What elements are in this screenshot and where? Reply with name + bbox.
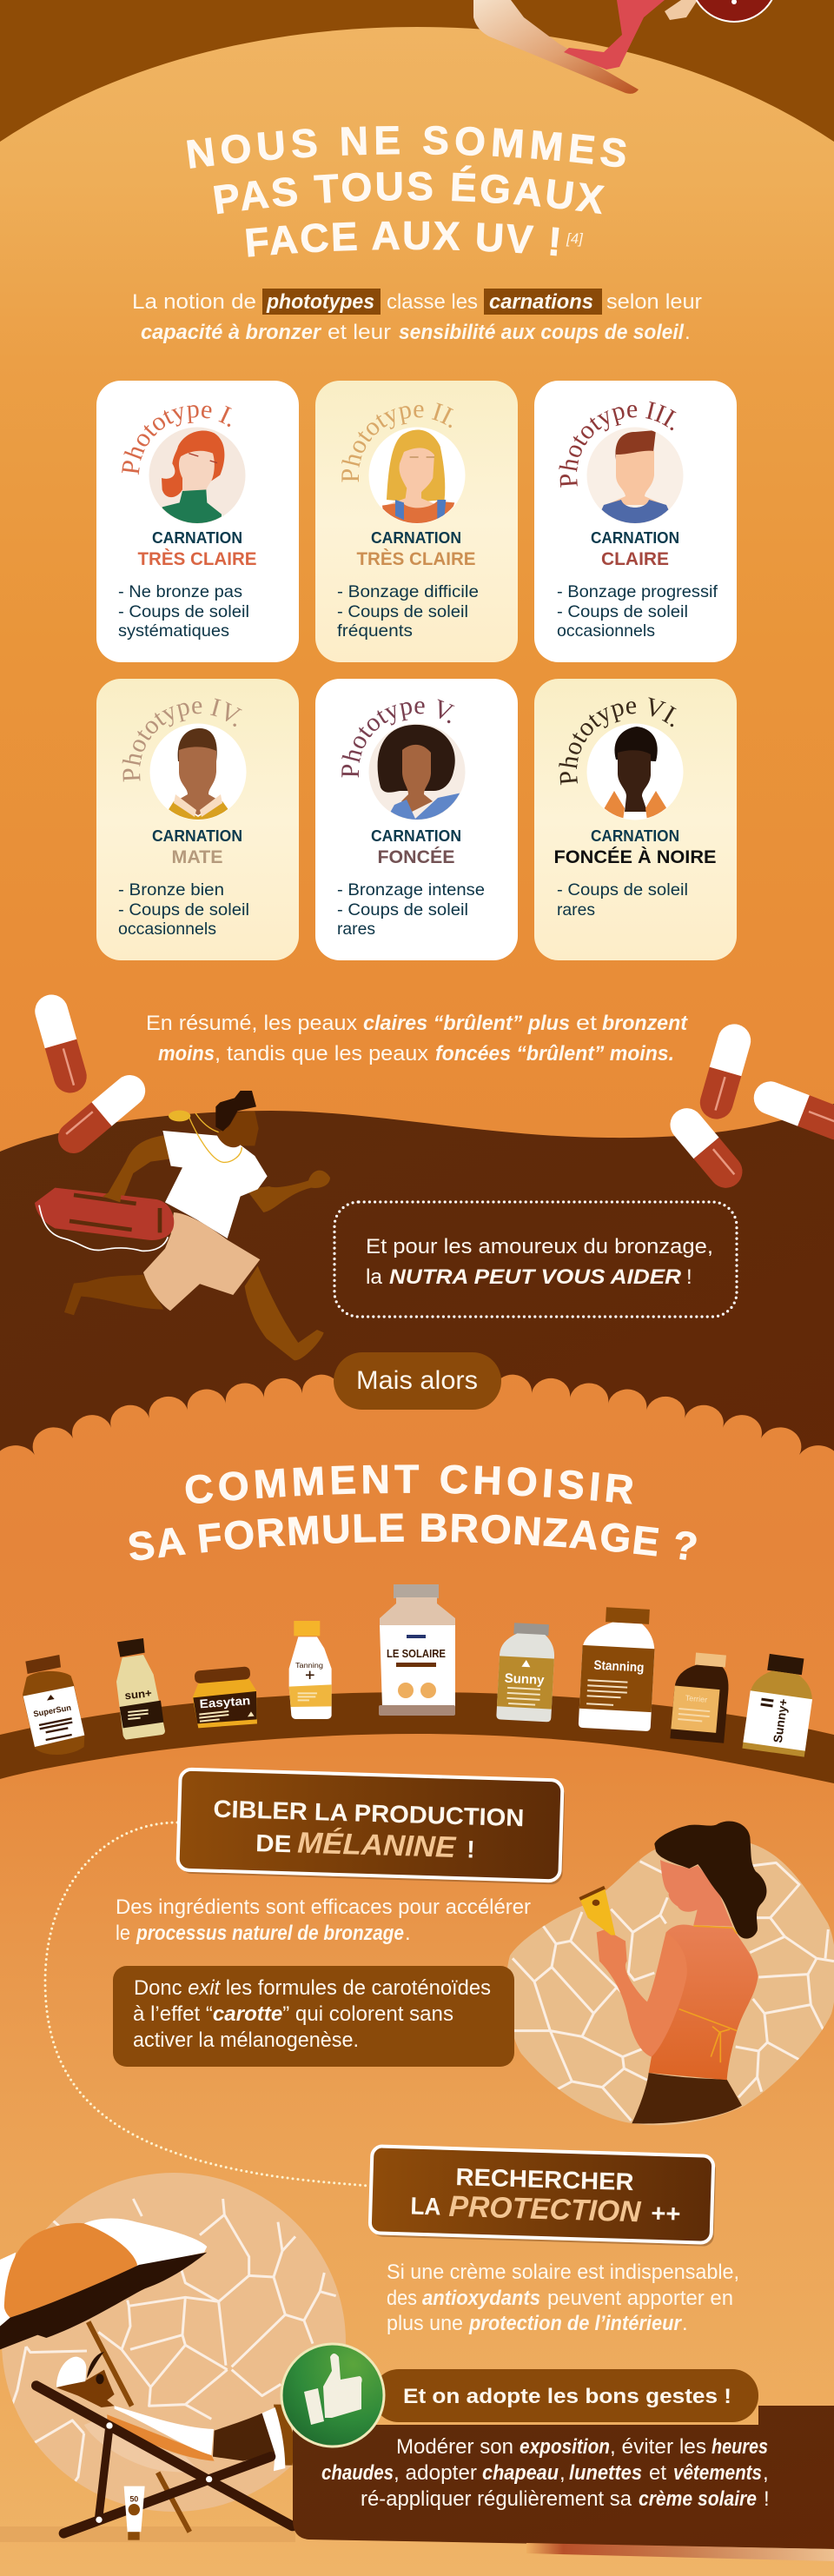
- heading box: cibler la production de mélanine: DE: [255, 1829, 292, 1857]
- panel: phototype I: systématiques: [118, 621, 229, 641]
- heading box: rechercher la protection: [369, 2146, 716, 2247]
- panel: phototype II: [315, 381, 518, 662]
- bottle: Stanning: Stanning: [593, 1658, 645, 1676]
- panel: bons gestes: [293, 2369, 834, 2561]
- panel: phototype VI: Phototype VI.: [559, 697, 677, 786]
- panel: phototype IV: [96, 679, 299, 960]
- icon: sunscreen tube: [124, 2486, 145, 2540]
- icon: thumbs up badge: [281, 2344, 384, 2447]
- text block: protection: Si une crème solaire est indispensable,: [387, 2261, 739, 2284]
- panel: phototype II: Phototype II.: [341, 402, 453, 482]
- heading box: rechercher la protection: ++: [651, 2200, 681, 2227]
- text block: ingredients: le: [116, 1922, 130, 1945]
- panel: phototype IV: - Coups de soleil: [118, 900, 249, 920]
- summary text: bronzent: [602, 1012, 688, 1035]
- bottle: Le Solaire: [379, 1584, 455, 1716]
- title: nous ne sommes pas tous égaux: PAS TOUS ÉGAUX: [214, 165, 605, 214]
- callout: carotene box: [113, 1966, 514, 2067]
- text block: protection: [387, 2261, 739, 2335]
- panel: phototype III: - Coups de soleil: [557, 602, 688, 621]
- panel: phototype V: Phototype V.: [341, 699, 455, 777]
- intro text block: classe les: [387, 290, 478, 314]
- panel: phototype II: CARNATION: [371, 529, 461, 547]
- summary text: foncées “brûlent” moins.: [435, 1042, 674, 1066]
- text block: ingredients: processus naturel de bronzage: [136, 1922, 404, 1945]
- callout: dotted box: Et pour les amoureux du bronzage,: [366, 1235, 713, 1258]
- heading box: cibler la production de mélanine: !: [467, 1836, 475, 1863]
- callout: carotene box: activer la mélanogenèse.: [133, 2028, 359, 2052]
- icon: capsule 2: [51, 1069, 152, 1159]
- text block: gestes: [321, 2435, 770, 2511]
- heading: comment choisir: [129, 1464, 697, 1561]
- intro text block: phototypes: [266, 290, 374, 314]
- pill: et on adopte les bons gestes: [373, 2369, 758, 2422]
- intro text block: carnations: [489, 290, 593, 314]
- icon: capsule 5: [664, 1101, 749, 1195]
- text block: gestes: ,: [763, 2461, 769, 2485]
- heading: comment choisir: SA FORMULE BRONZAGE ?: [129, 1513, 697, 1561]
- intro text block: .: [685, 321, 691, 344]
- callout: dotted box: [334, 1202, 737, 1317]
- intro text block: sensibilité aux coups de soleil: [399, 321, 685, 344]
- bottle: Sunny: [496, 1622, 556, 1723]
- panel: phototype V: - Bronzage intense: [337, 880, 485, 900]
- panel: phototype III: CLAIRE: [601, 549, 669, 569]
- panel: phototype V: CARNATION: [371, 827, 461, 845]
- panel: phototype VI: - Coups de soleil: [557, 880, 688, 900]
- text block: gestes: et: [649, 2461, 666, 2485]
- portrait: red hair woman: [149, 428, 245, 524]
- bottle: Le Solaire: LE SOLAIRE: [387, 1647, 446, 1660]
- text block: gestes: chaudes: [321, 2461, 394, 2485]
- bottle: Tanning+: [289, 1621, 332, 1719]
- portrait: man with matte skin: [149, 723, 247, 820]
- text block: gestes: crème solaire: [639, 2487, 757, 2511]
- bottle: sun+: sun+: [124, 1687, 152, 1702]
- panel: phototype IV: occasionnels: [118, 920, 216, 939]
- panel: phototype IV: Phototype IV.: [122, 699, 242, 782]
- panel: phototype V: FONCÉE: [377, 847, 455, 867]
- text block: gestes: , adopter: [394, 2461, 477, 2485]
- top brown band with arc: [0, 0, 834, 142]
- text block: protection: plus une: [387, 2312, 463, 2335]
- text block: gestes: heures: [712, 2435, 768, 2459]
- text block: gestes: , éviter les: [610, 2435, 706, 2459]
- text block: gestes: exposition: [520, 2435, 610, 2459]
- text block: ingredients: Des ingrédients sont efficaces pour accélérer: [116, 1895, 531, 1919]
- bottle: dark amber: [670, 1651, 731, 1743]
- bottle: Tanning+: Tanning: [295, 1662, 323, 1670]
- panel: phototype I: [96, 381, 299, 662]
- text block: ingredients: .: [405, 1922, 411, 1945]
- portrait: man with dark skin: [587, 723, 683, 820]
- icon: sunscreen tube: 50: [129, 2495, 138, 2504]
- text block: gestes: ré-appliquer régulièrement sa: [361, 2487, 632, 2511]
- summary text: et: [576, 1012, 597, 1035]
- text block: protection: des: [387, 2287, 417, 2310]
- intro text block: et leur: [328, 321, 391, 344]
- illustration: skin cells and woman: [504, 1821, 834, 2129]
- heading box: cibler la production de mélanine: [177, 1769, 566, 1885]
- panel: phototype II: TRÈS CLAIRE: [356, 549, 476, 569]
- illustration: surfboard and ribbon at top: [473, 0, 778, 94]
- panel: phototype IV: CARNATION: [152, 827, 242, 845]
- callout: carotene box: à l’effet “carotte” qui colorent sans: [133, 2002, 453, 2026]
- icon: capsule 4: [749, 1077, 834, 1145]
- dark brown wave section with scalloped bottom: [0, 1104, 834, 1477]
- pill: mais alors: Mais alors: [356, 1366, 478, 1395]
- bottle: Easytan jar: Easytan: [199, 1693, 251, 1710]
- title: nous ne sommes pas tous égaux: FACE AUX UV !: [246, 221, 559, 257]
- icon: capsule 1: [31, 991, 90, 1097]
- panel: phototype I: - Ne bronze pas: [118, 582, 242, 601]
- text block: protection: protection de l’intérieur: [468, 2312, 683, 2335]
- text block: gestes: !: [764, 2487, 770, 2511]
- portrait: blonde woman: [368, 428, 466, 524]
- text block: gestes: vêtements: [673, 2461, 762, 2485]
- bottle: Sunny: Sunny: [504, 1671, 546, 1688]
- text block: ingredients: [116, 1895, 531, 1945]
- portrait: woman with dark curly hair: [368, 723, 466, 820]
- heading box: rechercher la protection: RECHERCHER: [455, 2163, 634, 2195]
- dotted connector path: [45, 1822, 368, 2186]
- heading box: cibler la production de mélanine: MÉLANINE: [297, 1827, 457, 1864]
- intro text block: La notion de: [132, 290, 256, 314]
- intro text block: capacité à bronzer: [141, 321, 322, 344]
- portrait: man with brown hair: [587, 428, 683, 524]
- bottle: Stanning: [579, 1606, 657, 1731]
- summary text: claires “brûlent” plus: [363, 1012, 570, 1035]
- bottle: dark amber: Terrier: [685, 1694, 708, 1704]
- panel: phototype V: [315, 679, 518, 960]
- text block: gestes: Modérer son: [396, 2435, 513, 2459]
- panel: phototype III: [534, 381, 737, 662]
- illustration: running lifeguard: [35, 1091, 330, 1360]
- bottle: sun+: [116, 1638, 165, 1740]
- text block: protection: .: [682, 2312, 688, 2335]
- illustration: beach chair, umbrella and sunbather: [0, 2218, 295, 2540]
- bottle: SuperSun: SuperSun: [33, 1703, 72, 1718]
- panel: phototype II: - Bonzage difficile: [337, 582, 479, 601]
- heading: comment choisir: COMMENT CHOISIR: [186, 1464, 632, 1504]
- summary text: En résumé, les peaux: [146, 1012, 357, 1035]
- callout: dotted box: !: [686, 1265, 692, 1289]
- panel: phototype III: occasionnels: [557, 621, 655, 641]
- pill: et on adopte les bons gestes: Et on adopte les bons gestes !: [403, 2385, 731, 2408]
- intro text block: [132, 289, 702, 344]
- panel: phototype I: - Coups de soleil: [118, 602, 249, 621]
- intro text block: selon leur: [606, 290, 702, 314]
- heading box: rechercher la protection: PROTECTION: [448, 2190, 642, 2228]
- heading box: rechercher la protection: LA: [410, 2193, 441, 2221]
- text block: gestes: ,: [559, 2461, 566, 2485]
- panel: phototype III: CARNATION: [591, 529, 679, 547]
- panel: phototype I: CARNATION: [152, 529, 242, 547]
- title: nous ne sommes pas tous égaux: NOUS NE SOMMES: [187, 125, 626, 169]
- panel: phototype IV: - Bronze bien: [118, 880, 224, 900]
- bottle: Sunny+: Sunny+: [771, 1698, 791, 1743]
- text block: gestes: lunettes: [569, 2461, 642, 2485]
- panel: phototype V: - Coups de soleil: [337, 900, 468, 920]
- text block: gestes: chapeau: [482, 2461, 559, 2485]
- text block: protection: peuvent apporter en: [547, 2287, 733, 2310]
- title: nous ne sommes pas tous égaux: [187, 125, 626, 257]
- dark shelf arc under bottles: [0, 1692, 834, 1783]
- panel: phototype VI: rares: [557, 900, 595, 920]
- panel: phototype VI: CARNATION: [591, 827, 679, 845]
- panel: phototype II: - Coups de soleil: [337, 602, 468, 621]
- pill: mais alors: [334, 1352, 501, 1410]
- panel: phototype III: Phototype III.: [559, 402, 676, 488]
- bottle: SuperSun: [23, 1655, 84, 1755]
- callout: carotene box: Donc exit les formules de caroténoïdes: [134, 1976, 491, 2000]
- summary text: moins: [158, 1042, 215, 1066]
- callout: dotted box: la: [366, 1265, 383, 1289]
- bottle: Sunny+: [742, 1652, 817, 1757]
- icon: capsule 3: [696, 1020, 755, 1123]
- panel: phototype II: fréquents: [337, 621, 413, 641]
- text block: protection: antioxydants: [422, 2287, 540, 2310]
- skin cells backdrop 2: [0, 2164, 348, 2520]
- panel: phototype I: Phototype I.: [122, 405, 232, 475]
- bottle: Easytan jar: [193, 1666, 257, 1728]
- panel: phototype VI: FONCÉE À NOIRE: [554, 847, 716, 867]
- panel: phototype VI: [534, 679, 737, 960]
- panel: phototype V: rares: [337, 920, 375, 939]
- panel: phototype III: - Bonzage progressif: [557, 582, 718, 601]
- summary text: , tandis que les peaux: [215, 1042, 428, 1066]
- summary text: [146, 1012, 688, 1066]
- callout: dotted box: NUTRA PEUT VOUS AIDER: [389, 1265, 682, 1289]
- panel: phototype I: TRÈS CLAIRE: [137, 549, 257, 569]
- heading box: cibler la production de mélanine: CIBLER LA PRODUCTION: [213, 1796, 525, 1831]
- sand strip: [0, 2526, 295, 2542]
- panel: phototype IV: MATE: [172, 847, 222, 867]
- title: nous ne sommes pas tous égaux: [4]: [566, 230, 584, 247]
